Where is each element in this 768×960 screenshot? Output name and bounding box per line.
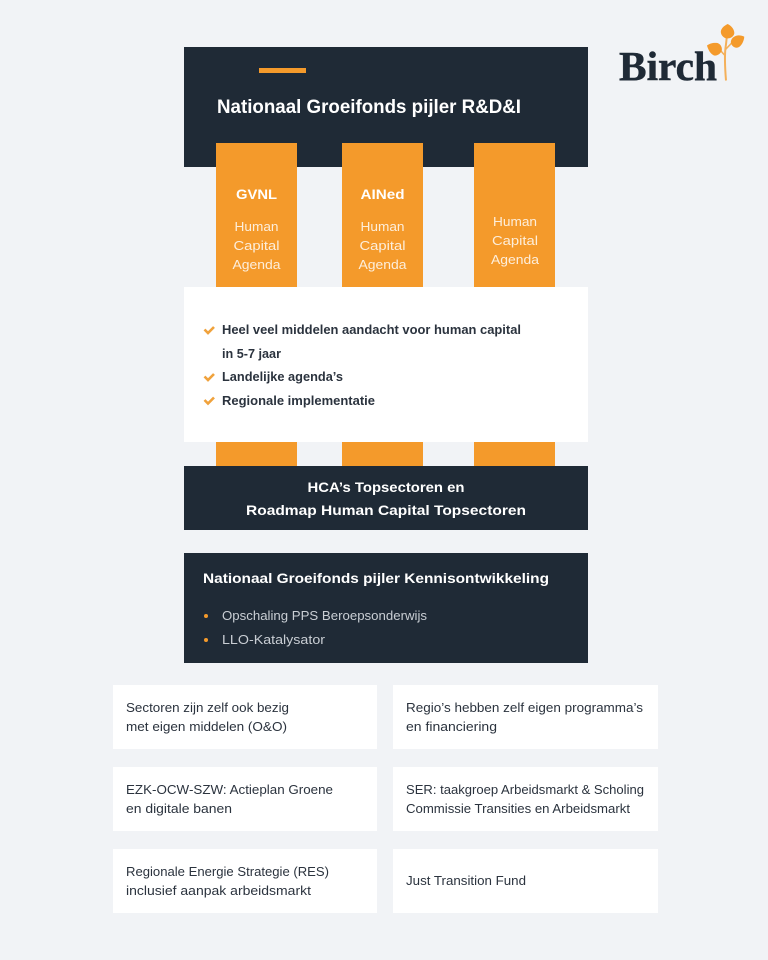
panel: HCA's Topsectoren (184, 466, 588, 530)
card: EZK-OCW-SZW: en digitale banen (126, 802, 232, 816)
text: second item: Landelijke agenda’s (222, 370, 343, 384)
card: RES (113, 849, 377, 913)
card: Regio's (393, 685, 658, 749)
text: bullet two: LLO-Katalysator (222, 633, 325, 647)
logo: Birch: Birch (619, 43, 717, 89)
panel: HCA's Topsectoren: Roadmap Human Capital Topsectoren (246, 502, 526, 518)
card: Sectoren: Sectoren zijn zelf ook bezig (126, 701, 289, 715)
logo: Birch (619, 24, 744, 89)
card: Just Transition Fund: Just Transition Fund (406, 874, 526, 888)
panel: top header (184, 47, 588, 167)
bullet (204, 614, 208, 618)
pillar: GVNL: Capital (234, 239, 280, 253)
card: EZK-OCW-SZW (113, 767, 377, 831)
text: first item continued: in 5-7 jaar (222, 347, 281, 361)
pillar: AINed: Capital (360, 239, 406, 253)
card: Just Transition Fund (393, 849, 658, 913)
pillar: AINed: Human (360, 220, 405, 234)
card: SER: Commissie Transities en Arbeidsmarkt (406, 802, 631, 816)
panel: HCA's Topsectoren: HCA’s Topsectoren en (308, 479, 464, 495)
panel: pijler Kennisontwikkeling (184, 553, 588, 663)
icon: check (204, 374, 214, 380)
card: Regio's: Regio’s hebben zelf eigen programma’s (406, 701, 643, 715)
icon: check (204, 398, 214, 404)
pillar: third agenda: Capital (492, 234, 538, 248)
accent bar (259, 68, 306, 73)
pillar: GVNL: GVNL (236, 186, 277, 202)
text: bullet one: Opschaling PPS Beroepsonderwijs (222, 609, 427, 623)
card: Regio's: en financiering (406, 720, 497, 734)
text: third item: Regionale implementatie (222, 394, 375, 408)
card: RES: Regionale Energie Strategie (RES) (126, 865, 329, 879)
bullet (204, 638, 208, 642)
pillar: AINed: Agenda (358, 258, 407, 272)
panel: checklist (184, 287, 588, 442)
pillar: AINed: AINed (360, 186, 404, 202)
pillar: GVNL (216, 143, 297, 287)
pillar: third agenda: Agenda (491, 253, 539, 267)
card: EZK-OCW-SZW: EZK-OCW-SZW: Actieplan Groene (126, 783, 333, 797)
pillar lower stubs (216, 442, 555, 466)
pillar: AINed (342, 143, 423, 287)
card: Sectoren (113, 685, 377, 749)
icon: check (204, 327, 214, 333)
pillar: third agenda: Human (493, 215, 537, 229)
pillar: GVNL: Agenda (232, 258, 281, 272)
card: SER: SER: taakgroep Arbeidsmarkt & Scholing (406, 783, 644, 797)
card: SER (393, 767, 658, 831)
heading: Nationaal Groeifonds pijler Kennisontwikkeling (203, 570, 549, 586)
card: RES: inclusief aanpak arbeidsmarkt (126, 884, 312, 898)
pillar: GVNL: Human (234, 220, 279, 234)
title: Nationaal Groeifonds pijler R&D&I (217, 96, 521, 118)
card: Sectoren: met eigen middelen (O&O) (126, 720, 287, 734)
pillar: third agenda (474, 143, 555, 287)
text: first item: Heel veel middelen aandacht voor human capital (222, 323, 521, 337)
